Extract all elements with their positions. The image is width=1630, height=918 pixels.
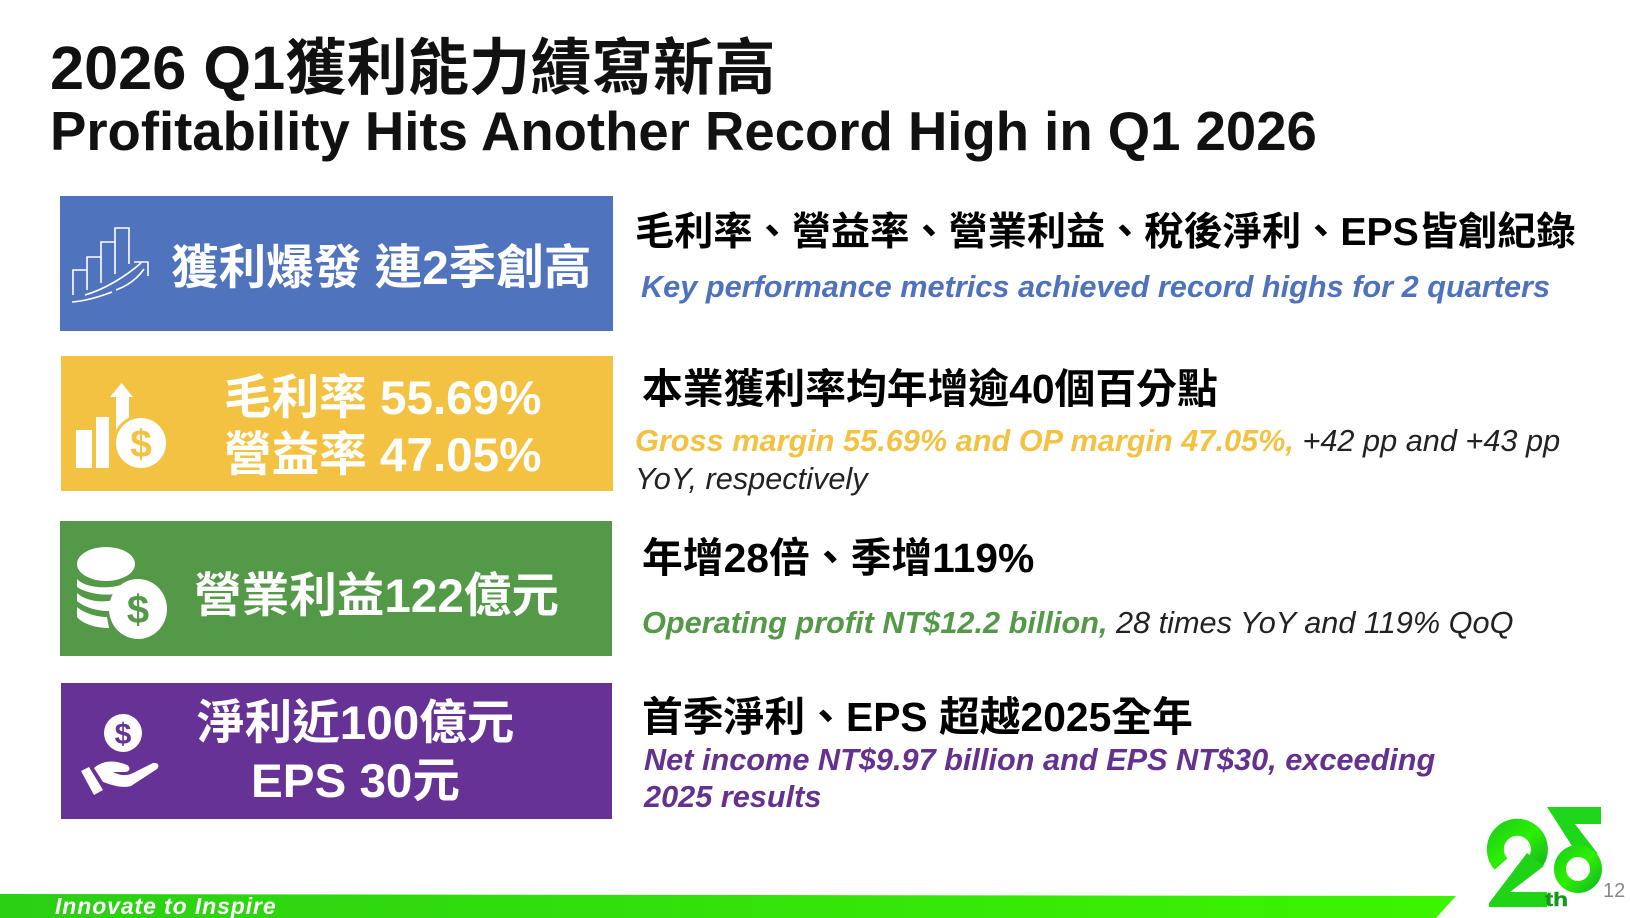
label: op margin: 營益率 47.05%: [224, 429, 541, 482]
subtext line 2: 2025 results: [644, 779, 821, 814]
subtext: Net income NT$9.97 billion and EPS NT$30, exceeding: [644, 742, 1435, 777]
icon: bars and dollar: [76, 383, 166, 468]
icon: coins and dollar: $: [127, 588, 149, 632]
panel: operating profit: [60, 521, 612, 656]
subtext: Key performance metrics achieved record highs for 2 quarters: [641, 269, 1550, 304]
icon: coins and dollar: [77, 547, 167, 639]
icon: bars and dollar: $: [130, 423, 152, 466]
label: EPS: EPS 30元: [251, 755, 460, 808]
heading: 毛利率、營益率、營業利益、稅後淨利、EPS皆創紀錄: [635, 211, 1576, 254]
text: margins: [635, 366, 1560, 496]
logo: 25th anniversary: th: [1545, 890, 1568, 911]
icon: hand holding coin: [81, 714, 158, 795]
panel: net income: [61, 683, 612, 819]
title: [50, 34, 1317, 162]
heading: 年增28倍、季增119%: [642, 535, 1034, 581]
label: 獲利爆發 連2季創高: [171, 242, 591, 295]
page number: 12: [1603, 880, 1625, 902]
label: net income: 淨利近100億元: [197, 697, 514, 750]
text: net income: [642, 694, 1435, 814]
subtext line 2: YoY, respectively: [635, 461, 868, 496]
text: operating profit: [642, 535, 1514, 640]
panel: margins: [61, 356, 613, 491]
heading: 本業獲利率均年增逾40個百分點: [642, 366, 1218, 412]
icon: hand holding coin: $: [115, 718, 132, 751]
icon: rising bar chart: [72, 227, 149, 303]
subtext: Gross margin 55.69% and OP margin 47.05%, +42 pp and +43 pp: [635, 423, 1560, 458]
heading: 首季淨利、EPS 超越2025全年: [642, 694, 1193, 740]
label: gross margin: 毛利率 55.69%: [224, 372, 541, 425]
subtext: Operating profit NT$12.2 billion, 28 times YoY and 119% QoQ: [642, 605, 1514, 640]
text: record highs: [635, 211, 1576, 304]
label: 營業利益122億元: [194, 570, 559, 623]
title: chinese: 2026 Q1獲利能力績寫新高: [50, 34, 776, 102]
panel: record profit: [60, 196, 613, 331]
title: english: Profitability Hits Another Record High in Q1 2026: [50, 101, 1317, 162]
